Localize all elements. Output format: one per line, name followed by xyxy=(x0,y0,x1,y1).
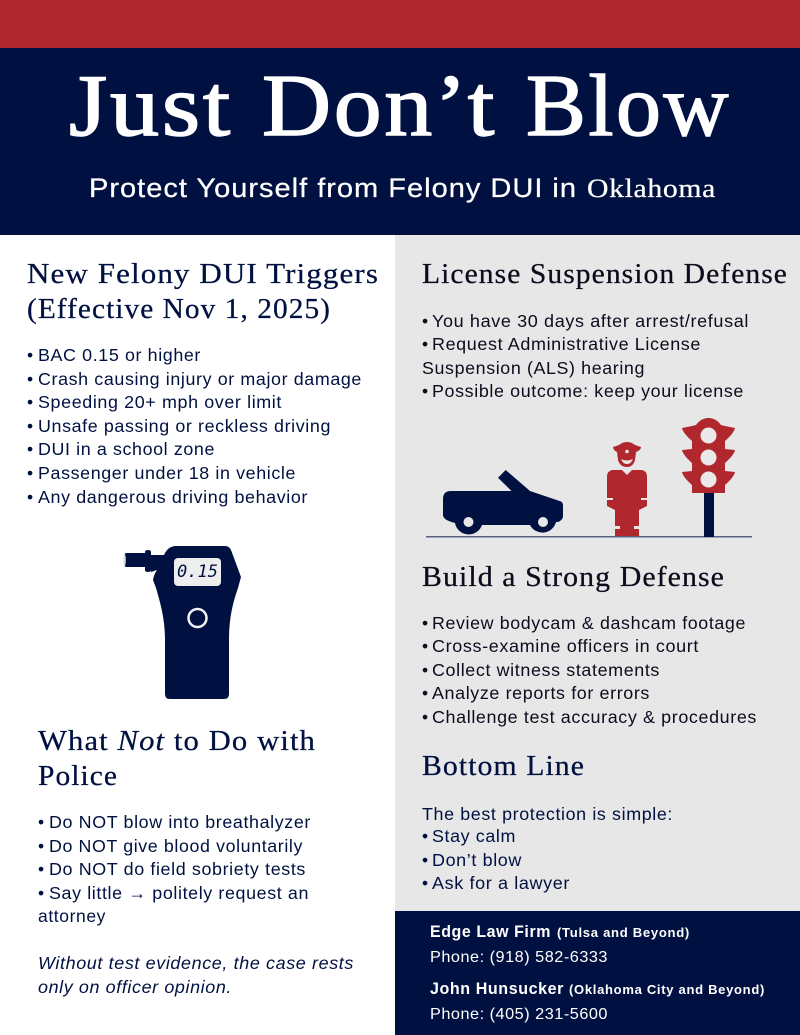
icon: traffic light xyxy=(682,418,735,537)
subtitle: Protect Yourself from Felony DUI in xyxy=(89,173,577,203)
list: license suspension steps: Possible outcome: keep your license xyxy=(432,381,744,401)
panel: bottom line xyxy=(422,751,673,893)
list: license suspension steps: Suspension (ALS) hearing xyxy=(422,358,645,378)
list: triggers: Passenger under 18 in vehicle xyxy=(38,463,296,483)
title: Blow xyxy=(526,58,731,155)
list: bottom line advice: • xyxy=(422,873,429,893)
list: license suspension steps: • xyxy=(422,311,429,331)
list: what not to do: attorney xyxy=(38,906,106,926)
heading: bottom line: Bottom Line xyxy=(422,751,585,782)
contact: Edge Law Firm: Phone: (918) 582-6333 xyxy=(430,949,608,966)
list: bottom line advice: • xyxy=(422,826,429,846)
icon: convertible car xyxy=(443,470,563,534)
panel: what not to do with police xyxy=(38,726,354,997)
icon: breathalyzer xyxy=(123,546,241,699)
illustration: traffic stop scene xyxy=(426,418,752,538)
top red band xyxy=(0,0,800,48)
list: triggers: • xyxy=(27,416,34,436)
list: defense steps: • xyxy=(422,683,429,703)
list: license suspension steps: • xyxy=(422,334,429,354)
title: Don’t xyxy=(262,58,497,155)
list: what not to do: Do NOT blow into breathalyzer xyxy=(49,812,311,832)
heading: what not to do: Police xyxy=(38,761,118,792)
contact: John Hunsucker: John Hunsucker xyxy=(430,980,564,998)
list: what not to do xyxy=(38,812,311,926)
list: bottom line advice: The best protection is simple: xyxy=(422,804,673,824)
list: defense steps: • xyxy=(422,613,429,633)
list: triggers: BAC 0.15 or higher xyxy=(38,345,201,365)
list: license suspension steps: • xyxy=(422,381,429,401)
note: test evidence: Without test evidence, the case rests xyxy=(38,953,354,973)
list: defense steps: Collect witness statements xyxy=(432,660,660,680)
list: what not to do: • xyxy=(38,883,45,903)
panel: build a strong defense xyxy=(422,562,757,727)
contact: Edge Law Firm: Edge Law Firm xyxy=(430,923,551,941)
heading: license suspension defense: License Suspension Defense xyxy=(422,259,788,290)
list: triggers xyxy=(27,345,362,507)
list: license suspension steps: Request Administrative License xyxy=(432,334,701,354)
list: defense steps xyxy=(422,613,757,727)
contact: John Hunsucker: (Oklahoma City and Beyond) xyxy=(569,982,765,997)
list: bottom line advice: Don’t blow xyxy=(432,850,522,870)
list: triggers: Speeding 20+ mph over limit xyxy=(38,392,282,412)
panel: new felony DUI triggers xyxy=(27,259,379,507)
contact: Edge Law Firm: (Tulsa and Beyond) xyxy=(557,925,690,940)
list: what not to do: Say little → politely request an xyxy=(49,883,309,903)
list: triggers: Unsafe passing or reckless driving xyxy=(38,416,331,436)
contact: John Hunsucker: Phone: (405) 231-5600 xyxy=(430,1006,608,1023)
list: triggers: • xyxy=(27,439,34,459)
list: defense steps: • xyxy=(422,707,429,727)
list: bottom line advice: Ask for a lawyer xyxy=(432,873,570,893)
icon: police officer xyxy=(607,442,647,536)
list: what not to do: • xyxy=(38,859,45,879)
contact: John Hunsucker xyxy=(430,980,765,1023)
note: test evidence xyxy=(38,953,354,997)
list: triggers: • xyxy=(27,463,34,483)
subtitle: Oklahoma xyxy=(587,173,716,203)
header banner xyxy=(0,48,800,235)
list: triggers: • xyxy=(27,392,34,412)
title: Just xyxy=(69,58,233,155)
list: defense steps: Cross-examine officers in court xyxy=(432,636,699,656)
ground line xyxy=(426,536,752,538)
note: test evidence: only on officer opinion. xyxy=(38,977,232,997)
list: bottom line advice: • xyxy=(422,850,429,870)
title xyxy=(69,58,731,155)
list: license suspension steps: You have 30 days after arrest/refusal xyxy=(432,311,749,331)
panel: contact box xyxy=(395,911,800,1035)
heading: new felony DUI triggers xyxy=(27,259,379,325)
list: triggers: Crash causing injury or major damage xyxy=(38,369,362,389)
heading: what not to do: What Not to Do with xyxy=(38,726,316,757)
heading: what not to do xyxy=(38,726,316,792)
list: bottom line advice: Stay calm xyxy=(432,826,516,846)
list: defense steps: • xyxy=(422,636,429,656)
list: triggers: DUI in a school zone xyxy=(38,439,215,459)
list: what not to do: Do NOT give blood voluntarily xyxy=(49,836,303,856)
list: defense steps: • xyxy=(422,660,429,680)
list: defense steps: Review bodycam & dashcam footage xyxy=(432,613,746,633)
icon: breathalyzer: 0.15 xyxy=(177,562,218,582)
panel: right column background xyxy=(395,235,800,911)
list: defense steps: Challenge test accuracy & procedures xyxy=(432,707,757,727)
list: triggers: • xyxy=(27,369,34,389)
list: triggers: • xyxy=(27,487,34,507)
list: what not to do: • xyxy=(38,812,45,832)
list: triggers: Any dangerous driving behavior xyxy=(38,487,308,507)
heading: build a strong defense: Build a Strong Defense xyxy=(422,562,725,593)
list: bottom line advice xyxy=(422,804,673,893)
contact: Edge Law Firm xyxy=(430,923,690,966)
heading: new felony DUI triggers: (Effective Nov 1, 2025) xyxy=(27,294,331,325)
list: license suspension steps xyxy=(422,311,749,401)
heading: new felony DUI triggers: New Felony DUI Triggers xyxy=(27,259,379,290)
list: defense steps: Analyze reports for errors xyxy=(432,683,650,703)
list: triggers: • xyxy=(27,345,34,365)
list: what not to do: Do NOT do field sobriety tests xyxy=(49,859,306,879)
panel: license suspension defense xyxy=(422,259,788,401)
list: what not to do: • xyxy=(38,836,45,856)
